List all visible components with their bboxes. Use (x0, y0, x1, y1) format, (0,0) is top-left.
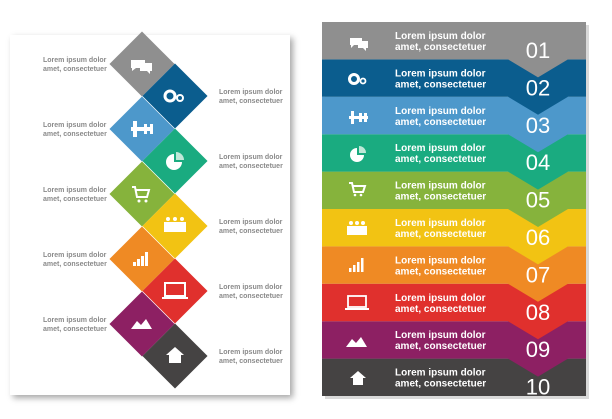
band texts: amet, consectetuer (395, 379, 486, 390)
band numbers: 06 (526, 225, 550, 250)
text: Lorem ipsum dolor (219, 154, 282, 161)
text: amet, consectetuer (43, 326, 107, 333)
band numbers: 03 (526, 113, 550, 138)
text: Lorem ipsum dolor (43, 57, 106, 64)
band 6 (322, 209, 586, 264)
text: Lorem ipsum dolor (219, 349, 282, 356)
band texts: Lorem ipsum dolor (395, 181, 486, 192)
band 7 (322, 246, 586, 302)
band 5 (322, 172, 586, 227)
band texts: amet, consectetuer (395, 117, 486, 128)
diamond 1 gray (109, 31, 175, 97)
band numbers: 05 (526, 188, 550, 213)
left labels (43, 56, 283, 365)
band texts: amet, consectetuer (395, 266, 486, 277)
text: Lorem ipsum dolor (219, 219, 282, 226)
band numbers (526, 38, 550, 400)
band icons (345, 38, 369, 385)
band texts: Lorem ipsum dolor (395, 31, 486, 42)
diamond 3 light blue (109, 96, 175, 162)
band 3 (322, 97, 586, 152)
band texts: amet, consectetuer (395, 341, 486, 352)
text: amet, consectetuer (219, 98, 283, 105)
band texts: Lorem ipsum dolor (395, 255, 486, 266)
diamond 8 red (142, 258, 208, 324)
band numbers: 09 (526, 337, 550, 362)
diamond 6 yellow (142, 193, 208, 259)
band texts (395, 31, 486, 390)
band numbers: 08 (526, 300, 550, 325)
text: amet, consectetuer (43, 261, 107, 268)
band numbers: 10 (526, 375, 550, 400)
band texts: amet, consectetuer (395, 79, 486, 90)
diamond 7 orange (109, 226, 175, 292)
band texts: amet, consectetuer (395, 42, 486, 53)
band numbers: 02 (526, 75, 550, 100)
band texts: Lorem ipsum dolor (395, 68, 486, 79)
band texts: Lorem ipsum dolor (395, 330, 486, 341)
band texts: amet, consectetuer (395, 304, 486, 315)
band texts: amet, consectetuer (395, 154, 486, 165)
text: amet, consectetuer (219, 293, 283, 300)
text: amet, consectetuer (219, 358, 283, 365)
band texts: Lorem ipsum dolor (395, 218, 486, 229)
band 9 (322, 321, 586, 377)
text: Lorem ipsum dolor (43, 252, 106, 259)
band numbers: 07 (526, 262, 550, 287)
text: amet, consectetuer (43, 66, 107, 73)
text: amet, consectetuer (219, 163, 283, 170)
diamond 5 green (109, 161, 175, 227)
text: amet, consectetuer (43, 131, 107, 138)
diamond 9 purple (109, 291, 175, 357)
diamond 10 dark (142, 323, 208, 389)
text: Lorem ipsum dolor (43, 122, 106, 129)
text: amet, consectetuer (219, 228, 283, 235)
diamond 2 dark blue (142, 63, 208, 129)
diamond 4 teal (142, 128, 208, 194)
band texts: Lorem ipsum dolor (395, 106, 486, 117)
panel: left card (10, 35, 290, 395)
text: amet, consectetuer (43, 196, 107, 203)
text: Lorem ipsum dolor (219, 89, 282, 96)
band texts: amet, consectetuer (395, 192, 486, 203)
band 10 (322, 359, 586, 396)
band texts: amet, consectetuer (395, 229, 486, 240)
band 2 (322, 59, 586, 115)
band numbers: 04 (526, 150, 550, 175)
text: Lorem ipsum dolor (219, 284, 282, 291)
band texts: Lorem ipsum dolor (395, 143, 486, 154)
band 1 (322, 22, 586, 77)
band texts: Lorem ipsum dolor (395, 293, 486, 304)
text: Lorem ipsum dolor (43, 317, 106, 324)
band texts: Lorem ipsum dolor (395, 368, 486, 379)
band 4 (322, 134, 586, 190)
text: Lorem ipsum dolor (43, 187, 106, 194)
band 8 (322, 284, 586, 339)
band numbers: 01 (526, 38, 550, 63)
